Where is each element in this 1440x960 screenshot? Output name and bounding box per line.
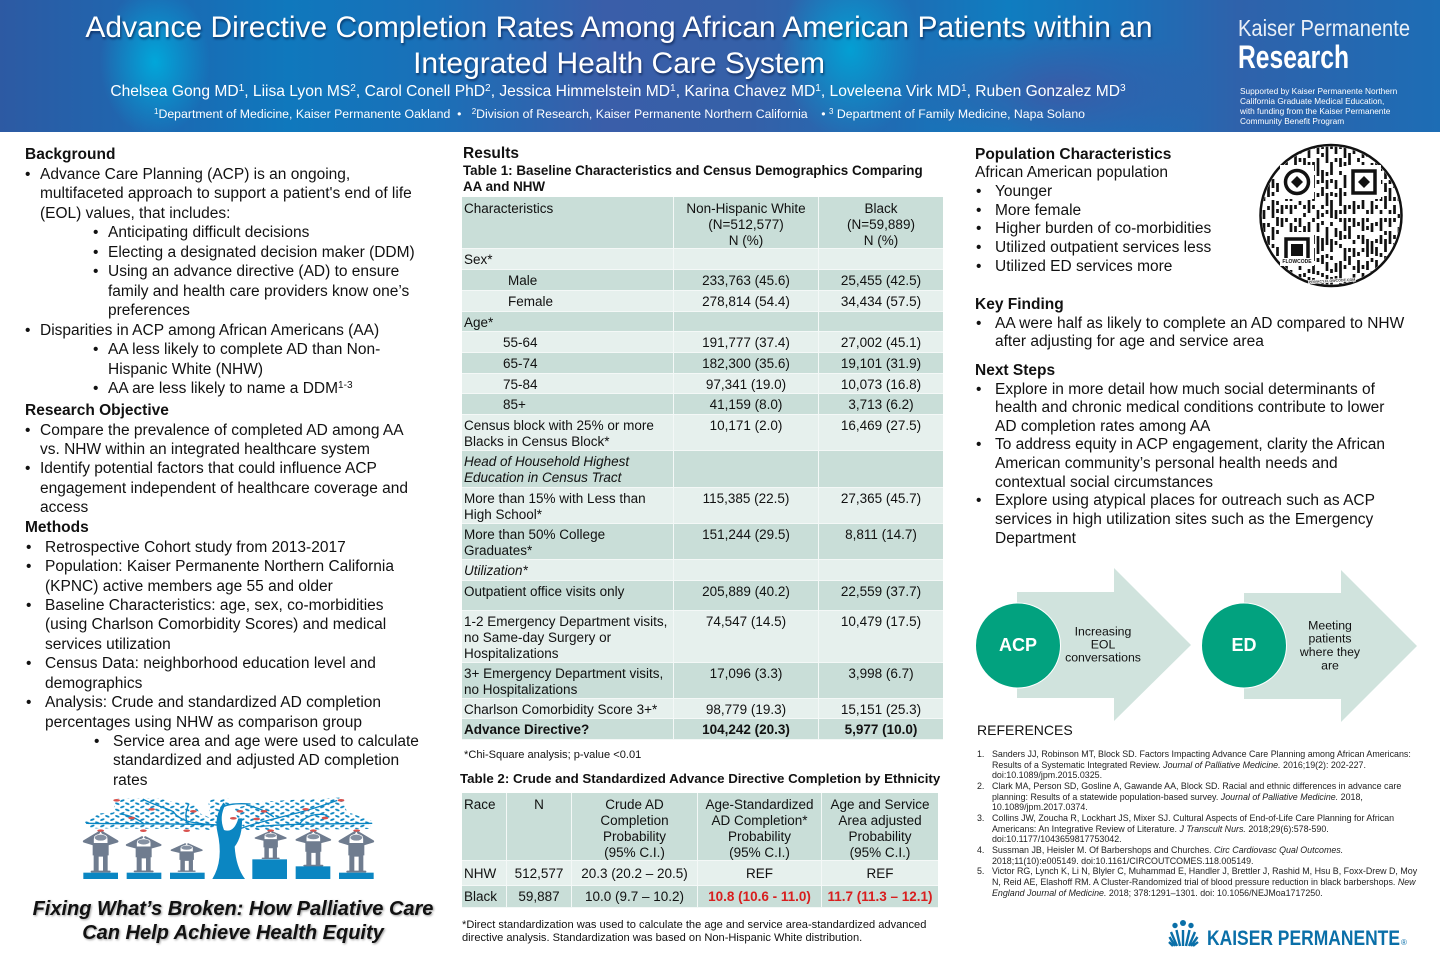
table 2: crude and standardized completion: 10.0 (9.7 – 10.2) — [585, 889, 684, 904]
text: background: AA are less likely to name a DDM1-3 — [108, 380, 353, 397]
text: background: (EOL) values, that includes: — [40, 204, 230, 222]
reference list: 5. — [977, 866, 984, 876]
text: key finding: after adjusting for age and service area — [995, 333, 1264, 350]
table 1: baseline characteristics: Outpatient office visits only — [464, 584, 624, 599]
table 2: crude and standardized completion: NHW — [464, 866, 496, 881]
table 1: baseline characteristics: 191,777 (37.4) — [702, 335, 790, 350]
diagram: ED arrow: Meeting — [1308, 618, 1352, 632]
text: next steps: Department — [995, 530, 1076, 547]
table 2: crude and standardized completion: Completion — [600, 813, 669, 828]
table 1: baseline characteristics: 115,385 (22.5) — [703, 491, 789, 506]
table 2: crude and standardized completion: 59,887 — [518, 889, 560, 904]
text: research objective: Identify potential factors that could influence ACP — [40, 460, 377, 477]
header banner — [0, 0, 1440, 132]
table 2: crude and standardized completion: Probability — [603, 829, 666, 844]
reference list: 3. — [977, 813, 984, 823]
text: background: Disparities in ACP among African Americans (AA) — [40, 322, 379, 338]
text: background: multifaceted approach to support a patient's end of life — [40, 185, 412, 202]
table 1: baseline characteristics: More than 50% College — [464, 527, 605, 542]
table 1: baseline characteristics: Black — [864, 201, 898, 216]
heading: population characteristics: Population Characteristics — [975, 146, 1171, 163]
table 1: baseline characteristics: 10,073 (16.8) — [841, 377, 921, 392]
table 1: baseline characteristics: 3+ Emergency Department visits, — [464, 666, 663, 681]
diagram: ED arrow: patients — [1308, 632, 1352, 646]
diagram: ED arrow: where they — [1299, 645, 1361, 659]
reference list: Americans: An Integrative Review of Literature. J Transcult Nurs. 2018;29(6):578-590. — [992, 824, 1329, 834]
table 1: baseline characteristics: 10,479 (17.5) — [841, 614, 921, 629]
panel: right column findings — [975, 146, 1404, 547]
table 2: crude and standardized completion: REF — [866, 866, 894, 881]
text: population characteristics: Younger — [995, 183, 1052, 200]
reference list: Sussman JB, Heisler M. Of Barbershops and Churches. Circ Cardiovasc Qual Outcomes. — [992, 845, 1343, 855]
table 2: crude and standardized completion: N — [534, 797, 544, 812]
table 1: baseline characteristics: 10,171 (2.0) — [710, 418, 782, 433]
table 2: crude and standardized completion: (95% C.I.) — [850, 845, 910, 860]
table 2: crude and standardized completion: (95% C.I.) — [604, 845, 665, 860]
text: next steps: To address equity in ACP engagement, clarity the African — [995, 436, 1385, 453]
logo: Kaiser Permanente Research: Research — [1238, 39, 1349, 75]
QR finder patterns: FLOWCODE — [1282, 259, 1312, 265]
authors: Chelsea Gong MD1, Liisa Lyon MS2, Carol Conell PhD2, Jessica Himmelstein MD1, Karina Chavez MD1, Loveleena Virk MD1, Ruben Gonzalez MD3 — [110, 82, 1126, 100]
text: background — [26, 166, 415, 397]
logo: Kaiser Permanente Research — [1238, 15, 1410, 75]
text: research objective: vs. NHW within an integrated healthcare system — [40, 441, 370, 458]
table 1 title: AA and NHW — [463, 178, 545, 194]
table 1: baseline characteristics: Hospitalizations — [464, 646, 559, 661]
table 1: baseline characteristics: 5,977 (10.0) — [845, 722, 917, 737]
reference list: Collins JW, Zoucha R, Lockhart JS, Mixer SJ. Cultural Aspects of End-of-Life Care Planning for African — [992, 813, 1394, 823]
table 1: baseline characteristics: Characteristics — [464, 201, 553, 216]
table 1: baseline characteristics: 16,469 (27.5) — [841, 418, 921, 433]
text: background: Anticipating difficult decisions — [108, 224, 309, 241]
table 1: baseline characteristics: 75-84 — [503, 377, 538, 392]
diagram: ED arrow — [1202, 570, 1417, 722]
text: population characteristics: Utilized outpatient services less — [995, 239, 1211, 256]
heading: references: REFERENCES — [977, 722, 1073, 738]
text: research objective: engagement independent of healthcare coverage and — [40, 480, 408, 497]
panel: references — [977, 722, 1418, 898]
closing statement — [33, 898, 435, 946]
tree trunk — [212, 803, 245, 879]
table 2: crude and standardized completion: 20.3 (20.2 – 20.5) — [581, 866, 688, 881]
table 2 title: Table 2: Crude and Standardized Advance Directive Completion by Ethnicity — [460, 771, 940, 786]
table 2 footnote — [462, 918, 926, 944]
table 1: baseline characteristics: 19,101 (31.9) — [841, 356, 921, 371]
reference list — [977, 749, 1418, 898]
text: methods: rates — [113, 772, 147, 789]
diagram: ACP arrow: EOL — [1091, 638, 1115, 652]
text: next steps: health and chronic medical conditions contribute to lower — [995, 399, 1384, 416]
funding note: Community Benefit Program — [1240, 116, 1344, 126]
people — [84, 832, 373, 873]
table 2: crude and standardized completion: REF — [746, 866, 773, 881]
table 1: baseline characteristics: Sex* — [464, 252, 493, 267]
text: population characteristics: Higher burden of co-morbidities — [995, 220, 1211, 237]
text: background: Hispanic White (NHW) — [108, 360, 263, 378]
text: key finding: AA were half as likely to complete an AD compared to NHW — [995, 314, 1404, 332]
table 2: crude and standardized completion: Crude AD — [605, 797, 664, 812]
text: methods: (KPNC) active members age 55 and older — [45, 578, 333, 595]
tree leaves — [83, 797, 373, 830]
closing statement: Fixing What’s Broken: How Palliative Care — [33, 898, 433, 920]
text: next steps: American community’s personal health needs and — [995, 455, 1338, 472]
text: background: AA less likely to complete AD than Non- — [108, 341, 380, 358]
logo: Kaiser Permanente — [1168, 920, 1407, 950]
text: research objective — [26, 422, 408, 516]
text: methods: Retrospective Cohort study from 2013-2017 — [45, 539, 346, 556]
table 1: baseline characteristics: no Same-day Surgery or — [464, 630, 611, 645]
reference list: planning: Results of a statewide population-based survey. Journal of Palliative Medicine. 2018, — [992, 792, 1363, 802]
text: methods: standardized and adjusted AD completion — [113, 752, 399, 769]
table 1: baseline characteristics: Graduates* — [464, 543, 532, 558]
table 1: baseline characteristics: Charlson Comorbidity Score 3+* — [464, 702, 657, 717]
text: methods: Analysis: Crude and standardized AD completion — [45, 694, 381, 711]
table 1: baseline characteristics: Head of Household Highest — [464, 454, 629, 469]
text: methods: Population: Kaiser Permanente Northern California — [45, 558, 394, 575]
heading: methods: Methods — [25, 519, 89, 536]
table 1: baseline characteristics: Blacks in Census Block* — [464, 434, 610, 449]
table 1 title: Table 1: Baseline Characteristics and Census Demographics Comparing — [463, 163, 923, 178]
funding note: Supported by Kaiser Permanente Northern — [1240, 86, 1397, 96]
table 2: crude and standardized completion: 512,577 — [515, 866, 563, 881]
text: population characteristics: More female — [995, 202, 1081, 218]
logo: Kaiser Permanente Research: Kaiser Permanente — [1238, 15, 1410, 41]
table 2 footnote: directive analysis. Standardization was based on Non-Hispanic White distribution. — [462, 932, 862, 944]
table 2: crude and standardized completion: Age and Service — [830, 797, 930, 812]
table 1: baseline characteristics: 3,998 (6.7) — [848, 666, 914, 681]
text: methods: Census Data: neighborhood education level and — [45, 655, 376, 672]
tree branches — [87, 799, 372, 830]
table 1: baseline characteristics: 34,434 (57.5) — [841, 294, 921, 309]
table 2: crude and standardized completion: Area adjusted — [838, 813, 922, 828]
table 1: baseline characteristics: (N=59,889) — [847, 217, 915, 232]
reference list: Results of a Systematic Integrated Review. Journal of Palliative Medicine. 2016;19(2): 202-227. — [992, 760, 1366, 770]
heading: next steps: Next Steps — [975, 362, 1055, 379]
table 1: baseline characteristics: 1-2 Emergency Department visits, — [464, 614, 667, 629]
table 1: baseline characteristics: 41,159 (8.0) — [710, 397, 782, 412]
table 1: baseline characteristics: 65-74 — [503, 356, 538, 371]
table 1: baseline characteristics — [462, 197, 943, 740]
table 2: crude and standardized completion: Black — [464, 889, 497, 904]
text: methods: services utilization — [45, 636, 171, 653]
table 1: baseline characteristics: N (%) — [864, 233, 898, 248]
heading: background: Background — [25, 146, 115, 162]
table 1: baseline characteristics: Education in Census Tract — [464, 470, 621, 485]
table 2: crude and standardized completion: Age-Standardized — [705, 797, 814, 812]
table 1: baseline characteristics: 22,559 (37.7) — [841, 584, 921, 599]
text: background: Electing a designated decision maker (DDM) — [108, 244, 415, 260]
text: research objective: access — [40, 499, 88, 516]
title: Integrated Health Care System — [413, 47, 825, 80]
table 2: crude and standardized completion: 11.7 (11.3 – 12.1) — [827, 889, 933, 904]
text: methods: percentages using NHW as comparison group — [45, 714, 362, 731]
text: next steps: Explore in more detail how much social determinants of — [995, 380, 1375, 398]
table 1: baseline characteristics: 27,002 (45.1) — [841, 335, 921, 350]
table 1: baseline characteristics: 233,763 (45.6) — [702, 273, 790, 288]
text: background: family and health care providers know one’s — [108, 282, 409, 300]
heading: research objective: Research Objective — [25, 402, 169, 419]
table 1: baseline characteristics: 104,242 (20.3) — [702, 722, 790, 737]
diagram: ED arrow: ED — [1231, 635, 1257, 655]
reference list: 2. — [977, 781, 984, 791]
text: background: preferences — [108, 302, 190, 319]
table 2: crude and standardized completion: Race — [464, 797, 496, 812]
panel: results — [460, 145, 943, 944]
panel: left column — [25, 146, 419, 789]
diagram: ACP arrow: conversations — [1065, 650, 1141, 664]
table 1 title — [463, 163, 923, 194]
table 1: baseline characteristics: (N=512,577) — [708, 217, 784, 232]
text: methods: Service area and age were used to calculate — [113, 733, 419, 750]
table 1: baseline characteristics: 278,814 (54.4) — [702, 294, 790, 309]
table 1: baseline characteristics: Male — [508, 273, 537, 288]
table 1: baseline characteristics: Age* — [464, 315, 493, 330]
reference list: 1. — [977, 749, 984, 759]
table 2: crude and standardized completion — [462, 793, 938, 908]
heading: results: Results — [463, 145, 519, 162]
text: population characteristics: Utilized ED services more — [995, 258, 1172, 275]
reference list: 2018;11(10):e005149. doi:10.1161/CIRCOUTCOMES.118.005149. — [992, 856, 1253, 866]
illustration: tree with people at different heights — [82, 798, 374, 879]
table 1: baseline characteristics: 55-64 — [503, 335, 538, 350]
table 1: baseline characteristics: 8,811 (14.7) — [845, 527, 917, 542]
table 1: baseline characteristics: Utilization* — [464, 563, 528, 578]
text: background: Advance Care Planning (ACP) is an ongoing, — [40, 166, 350, 182]
funding note: with funding from the Kaiser Permanente — [1240, 106, 1390, 116]
platforms — [83, 859, 374, 879]
text: methods: demographics — [45, 675, 142, 692]
text: next steps: AD completion rates among AA — [995, 418, 1210, 435]
logo: Kaiser Permanente: ® — [1401, 938, 1407, 947]
reference list: England Journal of Medicine. 2018; 378:1291–1301. doi: 10.1056/NEJMoa1717250. — [992, 888, 1323, 898]
table 1: baseline characteristics: 3,713 (6.2) — [848, 397, 914, 412]
text: population characteristics — [975, 164, 1211, 275]
table 1: baseline characteristics: 27,365 (45.7) — [841, 491, 921, 506]
text: next steps: services in high utilization sites such as the Emergency — [995, 511, 1373, 528]
table 1: baseline characteristics: no Hospitalizations — [464, 682, 577, 697]
table 1: baseline characteristics: 98,779 (19.3) — [706, 702, 786, 717]
table 1: baseline characteristics: Female — [508, 294, 553, 309]
text: background: Using an advance directive (AD) to ensure — [108, 263, 399, 280]
title — [85, 11, 1153, 82]
text: methods: (using Charlson Comorbidity Scores) and medical — [45, 616, 386, 633]
table 2: crude and standardized completion: Probability — [848, 829, 912, 844]
QR finder patterns — [1280, 165, 1381, 266]
table 1: baseline characteristics: 15,151 (25.3) — [841, 702, 921, 717]
heading: key finding: Key Finding — [975, 296, 1064, 313]
icon: QR code — [1259, 144, 1403, 288]
funding note: California Graduate Medical Education, — [1240, 96, 1384, 106]
reference list: Victor RG, Lynch K, Li N, Blyler C, Muhammad E, Handler J, Brettler J, Rashid M, Hsu B, Foxx-Drew D, Moy — [992, 866, 1417, 876]
table 1: baseline characteristics: 151,244 (29.5) — [702, 527, 790, 542]
reference list: Clark MA, Person SD, Gosline A, Gawande AA, Block SD. Racial and ethnic differences in advance care — [992, 781, 1401, 791]
text: methods — [26, 539, 419, 789]
diagram: ED arrow: are — [1321, 658, 1339, 672]
reference list: 10.1089/jpm.2017.0374. — [992, 802, 1088, 812]
table 1: baseline characteristics: 25,455 (42.5) — [841, 273, 921, 288]
table 1: baseline characteristics: N (%) — [729, 233, 763, 248]
reference list: doi:10.1089/jpm.2015.0325. — [992, 770, 1102, 780]
funding note — [1240, 86, 1397, 126]
affiliations: 1Department of Medicine, Kaiser Permanente Oakland • 2Division of Research, Kaiser Permanente Northern California • 3 Department of Family Medicine, Napa Solano — [154, 107, 1085, 121]
table 1: baseline characteristics: More than 15% with Less than — [464, 491, 646, 506]
table 2: crude and standardized completion: (95% C.I.) — [729, 845, 790, 860]
text: key finding — [976, 314, 1404, 350]
text: next steps: contextual social circumstances — [995, 474, 1213, 491]
table 1: baseline characteristics: Non-Hispanic White — [686, 201, 806, 216]
table 1: baseline characteristics: Census block with 25% or more — [464, 418, 654, 433]
table 1 footnote: *Chi-Square analysis; p-value <0.01 — [464, 749, 641, 761]
QR caption: PRIVACY.FLOWCODE.COM — [1309, 278, 1355, 284]
table 1: baseline characteristics: 97,341 (19.0) — [706, 377, 786, 392]
table 1: baseline characteristics: Advance Directive? — [464, 722, 589, 737]
diagram: ACP arrow — [976, 568, 1191, 721]
table 2: crude and standardized completion: Probability — [728, 829, 791, 844]
diagram: ACP arrow: ACP — [999, 635, 1037, 655]
reference list: N, Reid AE, Elashoff RM. A Cluster-Randomized trial of blood pressure reduction in black barbershops. New — [992, 877, 1416, 887]
text: next steps: Explore using atypical places for outreach such as ACP — [995, 492, 1375, 509]
table 1: baseline characteristics: 74,547 (14.5) — [706, 614, 786, 629]
text: population characteristics: African American population — [975, 164, 1168, 181]
table 2: crude and standardized completion: AD Completion* — [711, 813, 808, 828]
title: Advance Directive Completion Rates Among African American Patients within an — [85, 11, 1153, 44]
table 1: baseline characteristics: 205,889 (40.2) — [702, 584, 790, 599]
reference list: Sanders JJ, Robinson MT, Block SD. Factors Impacting Advance Care Planning among African Americans: — [992, 749, 1411, 759]
text: methods: Baseline Characteristics: age, sex, co-morbidities — [45, 597, 384, 614]
reference list: 4. — [977, 845, 984, 855]
closing statement: Can Help Achieve Health Equity — [82, 922, 384, 944]
apples — [97, 799, 360, 832]
table 2 footnote: *Direct standardization was used to calculate the age and service area-standardized advanced — [462, 918, 926, 930]
table 1: baseline characteristics: 17,096 (3.3) — [710, 666, 782, 681]
table 2: crude and standardized completion: 10.8 (10.6 - 11.0) — [708, 889, 811, 904]
diagram: ACP arrow: Increasing — [1075, 624, 1132, 638]
text: research objective: Compare the prevalence of completed AD among AA — [40, 422, 404, 439]
table 1: baseline characteristics: 182,300 (35.6) — [702, 356, 790, 371]
table 1: baseline characteristics: High School* — [464, 507, 542, 522]
table 1: baseline characteristics: 85+ — [503, 397, 526, 412]
text: next steps — [976, 380, 1385, 547]
reference list: doi:10.1177/1043659817753042. — [992, 834, 1122, 844]
